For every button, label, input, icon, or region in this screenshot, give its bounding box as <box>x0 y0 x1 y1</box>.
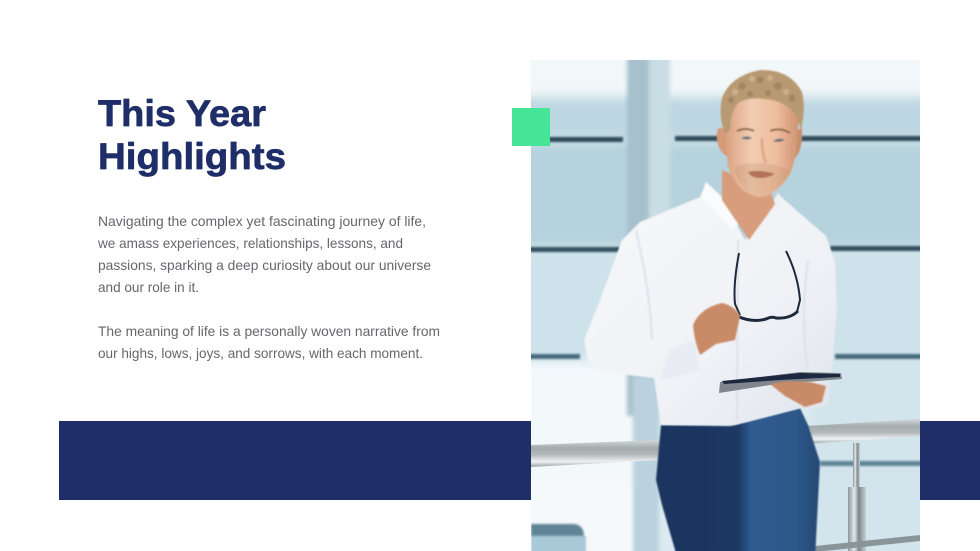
eyes and brows <box>737 129 790 133</box>
title <box>98 93 286 177</box>
head <box>717 70 804 197</box>
left hand <box>693 303 740 355</box>
title: Highlights <box>98 136 286 177</box>
glasses <box>734 251 800 320</box>
navy band: left <box>59 421 531 500</box>
body paragraph: meaning of life: our highs, lows, joys, and sorrows, with each moment. <box>98 345 423 361</box>
tablet <box>719 372 842 393</box>
navy band: right <box>920 421 980 500</box>
right hand <box>770 381 826 407</box>
body paragraph: journey of life: Navigating the complex yet fascinating journey of life, <box>98 213 426 229</box>
body paragraph: journey of life: we amass experiences, relationships, lessons, and <box>97 235 403 251</box>
hair <box>721 70 804 134</box>
body paragraph: journey of life: passions, sparking a deep curiosity about our universe <box>98 257 431 273</box>
photo background: office windows <box>520 50 930 551</box>
body paragraph: meaning of life <box>98 323 440 361</box>
railing <box>531 419 920 551</box>
photo: man in white shirt holding glasses and tablet <box>520 50 930 551</box>
neck <box>722 170 775 240</box>
nose and mouth <box>762 138 766 163</box>
body paragraph: meaning of life: The meaning of life is a personally woven narrative from <box>98 323 440 339</box>
title: This Year <box>98 93 266 134</box>
body paragraph: journey of life <box>97 213 431 295</box>
body paragraph: journey of life: and our role in it. <box>98 279 199 295</box>
green accent square <box>512 108 550 146</box>
trousers <box>656 408 820 551</box>
shirt <box>584 182 837 425</box>
